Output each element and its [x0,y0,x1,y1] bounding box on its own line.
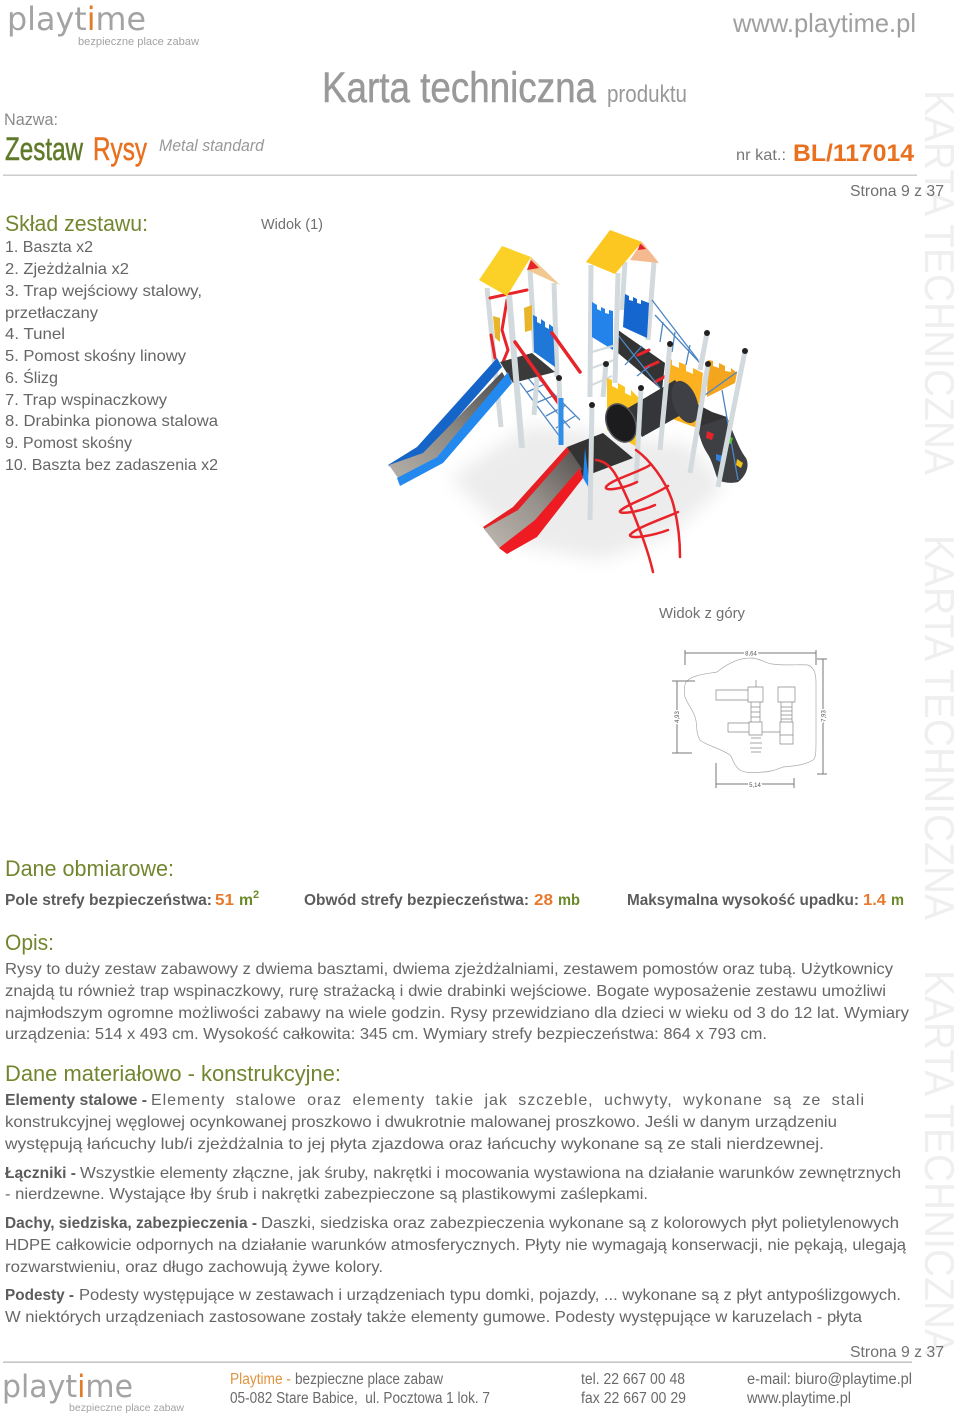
catalogue number: BL/117014 [793,140,915,167]
panel: skład zestawu: 7. Trap wspinaczkowy [5,392,167,409]
net ladder [520,377,580,437]
section: dane obmiarowe: Dane obmiarowe: [5,856,174,881]
tunnel [600,377,704,447]
section: opis: najmłodszym ogromne możliwości zabawy na wiele godzin. Rysy przewidziano dla dzieci w wieku od 3 do 12 lat. Wymiary [5,1005,909,1022]
left platform [500,353,555,383]
dimension labels: 7,93 [822,710,828,722]
dimension labels [675,652,828,789]
paragraph: elementy stalowe: konstrukcyjnej węglowej ocynkowanej proszkowo i dwukrotnie malowanej proszkowo. Jeśli w danym urządzeniu [5,1114,837,1131]
panel: skład zestawu: 5. Pomost skośny linowy [5,348,186,365]
product name: Zestaw [5,131,84,167]
website address: www.playtime.pl [732,8,916,38]
left roof [479,246,560,296]
logo: playtime header [7,0,199,48]
section: dane obmiarowe: mb [558,892,580,909]
section: opis: Opis: [5,930,54,955]
label: Widok (1): Widok (1) [261,216,323,233]
paragraph: łączniki: Łączniki - [5,1165,76,1182]
logo: playtime footer [2,1369,184,1414]
footer: address [230,1371,490,1407]
red spiral ladder [596,450,680,572]
section: dane obmiarowe: Obwód strefy bezpieczeństwa: [304,892,529,909]
paragraph: łączniki: - nierdzewne. Wystające łby śrub i nakrętki zabezpieczone są plastikowymi zaślepkami. [5,1186,648,1203]
paragraph: podesty: Podesty występujące w zestawach i urządzeniach typu domki, pojazdy, ... wykonane są z płyt antypoślizgowych. [79,1287,901,1304]
section: dane materiałowo-konstrukcyjne: Dane materiałowo - konstrukcyjne: [5,1061,341,1086]
rear climbing wall [693,372,748,483]
page number bottom: Strona 9 z 37 [850,1344,944,1361]
footer: email and website [746,1371,912,1407]
footer: phone and fax: tel. 22 667 00 48 [581,1371,685,1388]
section: dane obmiarowe: 1.4 [863,892,886,909]
product name: Nazwa: [4,110,58,129]
product name [4,110,265,167]
catalogue number: nr kat.: [736,147,786,164]
footer: address: 05-082 Stare Babice, ul. Pocztowa 1 lok. 7 [230,1390,490,1407]
watermark: vertical KARTA TECHNICZNA [916,90,960,1355]
panel: skład zestawu: 10. Baszta bez zadaszenia x2 [5,457,218,474]
paragraph: dachy, siedziska, zabezpieczenia: HDPE całkowicie odpornych na działanie warunków atmosferycznych. Płyty nie wymagają konserwacji, nie pękają, ulegają [5,1237,906,1254]
section: dane obmiarowe [5,856,904,909]
panel: skład zestawu: Skład zestawu: [5,211,148,236]
paragraph: podesty: W niektórych urządzeniach zastosowane zostały także elementy gumowe. Podesty występujące w karuzelach - płyta [5,1309,862,1326]
footer: address: Playtime - [230,1371,291,1388]
footer: phone and fax [581,1371,686,1407]
section: opis: znajdą tu również trap wspinaczkowy, rurę strażacką i dwie drabinki wejściowe. Bogate wyposażenie zestawu umożliwi [5,983,886,1000]
blue slide [388,358,512,486]
footer: email and website: www.playtime.pl [746,1390,851,1407]
section: dane obmiarowe: 51 [215,892,234,909]
product name: Metal standard [159,136,265,155]
illustration: playground set [388,230,748,572]
paragraph: elementy stalowe [4,1092,864,1153]
section: dane obmiarowe: m [239,892,253,909]
left tower back [487,270,557,427]
section: opis: urządzenia: 514 x 493 cm. Wysokość całkowita: 345 cm. Wymiary strefy bezpieczeństwa: 864 x 793 cm. [5,1026,767,1043]
paragraph: dachy, siedziska, zabezpieczenia: Daszki, siedziska oraz zabezpieczenia wykonane są z kolorowych płyt polietylenowych [261,1215,899,1232]
page number top: Strona 9 z 37 [850,183,944,200]
section: dane obmiarowe: Pole strefy bezpieczeństwa: [5,892,212,909]
section: dane obmiarowe: m [891,892,904,909]
paragraph: podesty: Podesty - [5,1287,74,1304]
panel: skład zestawu: przetłaczany [5,305,98,322]
product name: Rysy [93,131,147,167]
paragraph: dachy, siedziska, zabezpieczenia: Dachy, siedziska, zabezpieczenia - [5,1215,257,1232]
red slide [483,433,633,554]
paragraph: łączniki: Wszystkie elementy złączne, jak śruby, nakrętki i mocowania wystawiona na działanie warunków zewnętrznych [80,1165,901,1182]
logo: playtime header: bezpieczne place zabaw [78,36,199,48]
paragraph: elementy stalowe: Elementy stalowe oraz elementy takie jak szczeble, uchwyty, wykonane są ze stali [151,1092,864,1109]
paragraph: elementy stalowe: występują łańcuchy lub/i zjeżdżalnia to jej płyta zjazdowa oraz łańcuchy wykonane są ze stali nierdzewnej. [4,1136,824,1153]
section: opis: Rysy to duży zestaw zabawowy z dwiema basztami, dwiema zjeżdżalniami, zestawem pomostów oraz tubą. Użytkownicy [5,961,893,978]
panel: skład zestawu: 2. Zjeżdżalnia x2 [5,261,129,278]
title: Karta techniczna produktu: produktu [607,81,687,108]
section: opis [5,930,909,1043]
title: Karta techniczna produktu: Karta techniczna [322,64,596,112]
dimension labels: 4,93 [675,711,681,723]
posts with caps [556,330,748,520]
logo: playtime header: playtime [7,0,146,38]
footer: email and website: e-mail: biuro@playtime.pl [747,1371,912,1388]
equipment plan [716,680,795,752]
dimension lines [672,650,827,788]
dimension labels: 8,64 [745,652,757,658]
ground shadow [450,425,725,560]
panel: skład zestawu: 9. Pomost skośny [5,435,132,452]
orange walls [607,357,737,447]
top view plan with dimensions [672,650,828,789]
paragraph: łączniki [5,1165,901,1203]
panel: skład zestawu: 6. Ślizg [5,368,58,387]
dimension labels: 5,14 [749,783,761,789]
logo: playtime footer: bezpieczne place zabaw [69,1402,184,1414]
panel: skład zestawu: 3. Trap wejściowy stalowy, [5,283,202,300]
panel: skład zestawu: 8. Drabinka pionowa stalowa [5,413,218,430]
safety zone outline [684,658,816,773]
section: dane obmiarowe: 2 [253,889,259,901]
paragraph: dachy, siedziska, zabezpieczenia: rozwarstwieniu, oraz długo zachowują żywe kolory. [5,1259,383,1276]
panel: skład zestawu: 1. Baszta x2 [5,239,93,256]
panel: skład zestawu [5,211,218,474]
paragraph: elementy stalowe: Elementy stalowe - [5,1092,147,1109]
footer: address: bezpieczne place zabaw [295,1371,444,1388]
catalogue number [736,140,915,167]
section: dane materiałowo-konstrukcyjne [4,1061,906,1326]
paragraph: dachy, siedziska, zabezpieczenia [5,1215,906,1276]
footer: phone and fax: fax 22 667 00 29 [581,1390,686,1407]
right tower [586,230,700,397]
panel: skład zestawu: 4. Tunel [5,326,65,343]
logo: playtime footer: playtime [2,1369,133,1405]
paragraph: podesty [5,1287,901,1326]
section: dane obmiarowe: Maksymalna wysokość upadku: [627,892,859,909]
label: Widok z góry: Widok z góry [659,605,745,622]
section: dane obmiarowe: 28 [534,892,553,909]
